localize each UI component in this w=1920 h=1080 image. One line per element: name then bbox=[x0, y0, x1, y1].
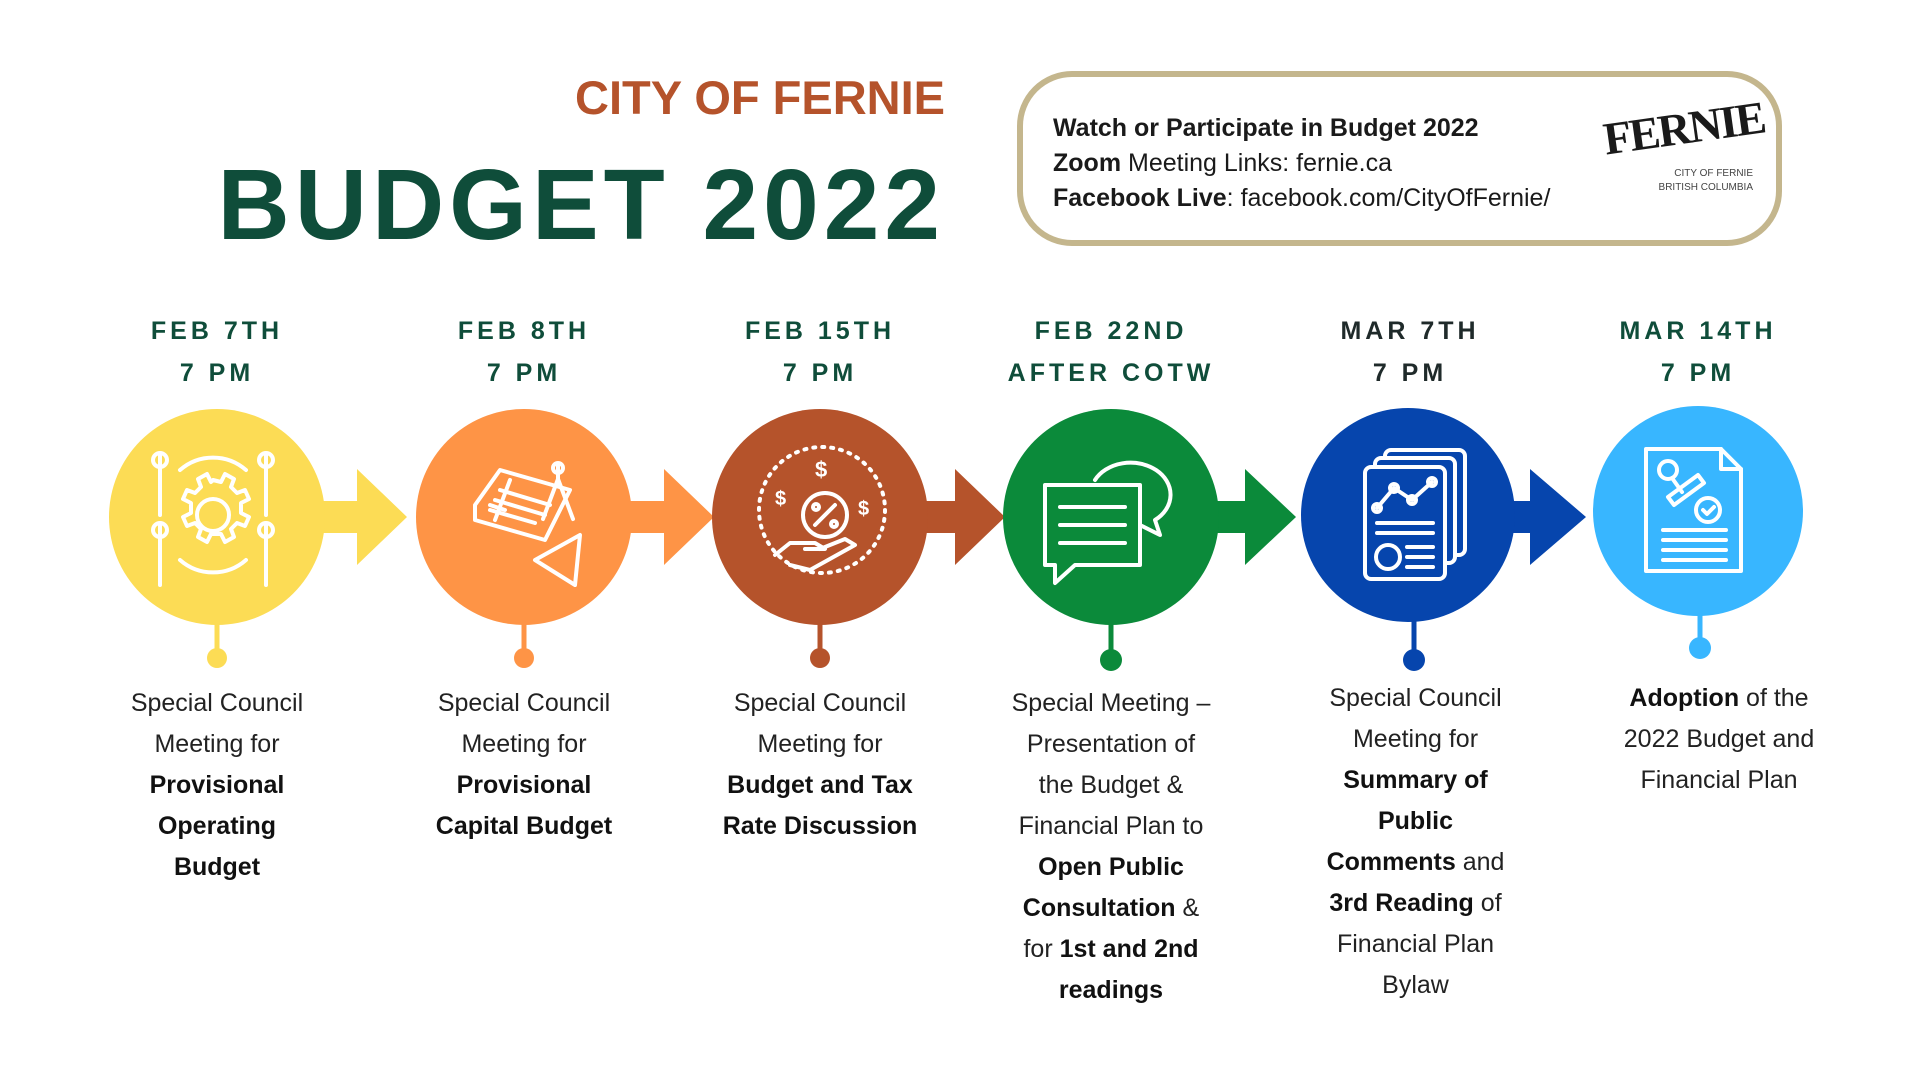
text: MAR 7TH bbox=[1340, 317, 1480, 345]
dates: 7 PM bbox=[180, 359, 254, 387]
text: 7 PM bbox=[1661, 359, 1735, 387]
icon: approved document bbox=[1646, 449, 1741, 571]
step 3 rust bbox=[712, 409, 1005, 668]
dates bbox=[151, 317, 283, 387]
icon: blueprint bbox=[475, 463, 580, 585]
step 2 orange bbox=[416, 409, 714, 668]
step 4 green bbox=[1003, 409, 1296, 671]
text: MAR 14TH bbox=[1619, 317, 1776, 345]
text: FEB 15TH bbox=[745, 317, 895, 345]
icon: people gear bbox=[153, 453, 273, 585]
text: step 5: Special Council Meeting for Summary of Public Comments and 3rd Reading of Financial Plan Bylaw bbox=[1327, 684, 1504, 999]
text: 7 PM bbox=[1373, 359, 1447, 387]
text: FEB 22ND bbox=[1035, 317, 1187, 345]
logo: fernie: BRITISH COLUMBIA bbox=[1659, 182, 1753, 193]
icon: reports bbox=[1365, 450, 1465, 579]
title: budget 2022: BUDGET 2022 bbox=[218, 149, 945, 261]
logo: fernie: CITY OF FERNIE bbox=[1674, 168, 1753, 179]
text: step 3: Special Council Meeting for Budget and Tax Rate Discussion bbox=[723, 689, 917, 840]
text: AFTER COTW bbox=[1008, 359, 1214, 387]
text: step 2: Special Council Meeting for Provisional Capital Budget bbox=[436, 689, 612, 840]
info box bbox=[1017, 71, 1782, 246]
info text bbox=[1053, 114, 1550, 212]
icon: hand with percent: $ bbox=[815, 457, 827, 482]
icon: hand with percent: $ bbox=[858, 498, 869, 520]
step 1 yellow bbox=[109, 409, 407, 668]
dates: FEB 7TH bbox=[151, 317, 283, 345]
text: FEB 8TH bbox=[458, 317, 590, 345]
text: step 4: Special Meeting – Presentation of the Budget & Financial Plan to Open Public Consultation & for 1st and 2nd readings bbox=[1012, 689, 1210, 1004]
text: step 1: Special Council Meeting for Provisional Operating Budget bbox=[131, 689, 303, 881]
text: 7 PM bbox=[487, 359, 561, 387]
text: 7 PM bbox=[783, 359, 857, 387]
step 5 blue bbox=[1301, 408, 1586, 671]
info text: Zoom Meeting Links: fernie.ca bbox=[1053, 149, 1392, 177]
logo: fernie: FERNIE bbox=[1600, 92, 1767, 165]
icon: speech bubbles bbox=[1045, 463, 1171, 583]
step 6 light blue bbox=[1593, 406, 1803, 659]
info text: Facebook Live: facebook.com/CityOfFernie/ bbox=[1053, 184, 1550, 212]
heading: city of fernie: CITY OF FERNIE bbox=[575, 71, 945, 124]
icon: hand with percent bbox=[759, 447, 885, 573]
info text: Watch or Participate in Budget 2022 bbox=[1053, 114, 1479, 142]
text: step 6: Adoption of the 2022 Budget and Financial Plan bbox=[1624, 684, 1814, 794]
icon: hand with percent: $ bbox=[775, 488, 786, 510]
